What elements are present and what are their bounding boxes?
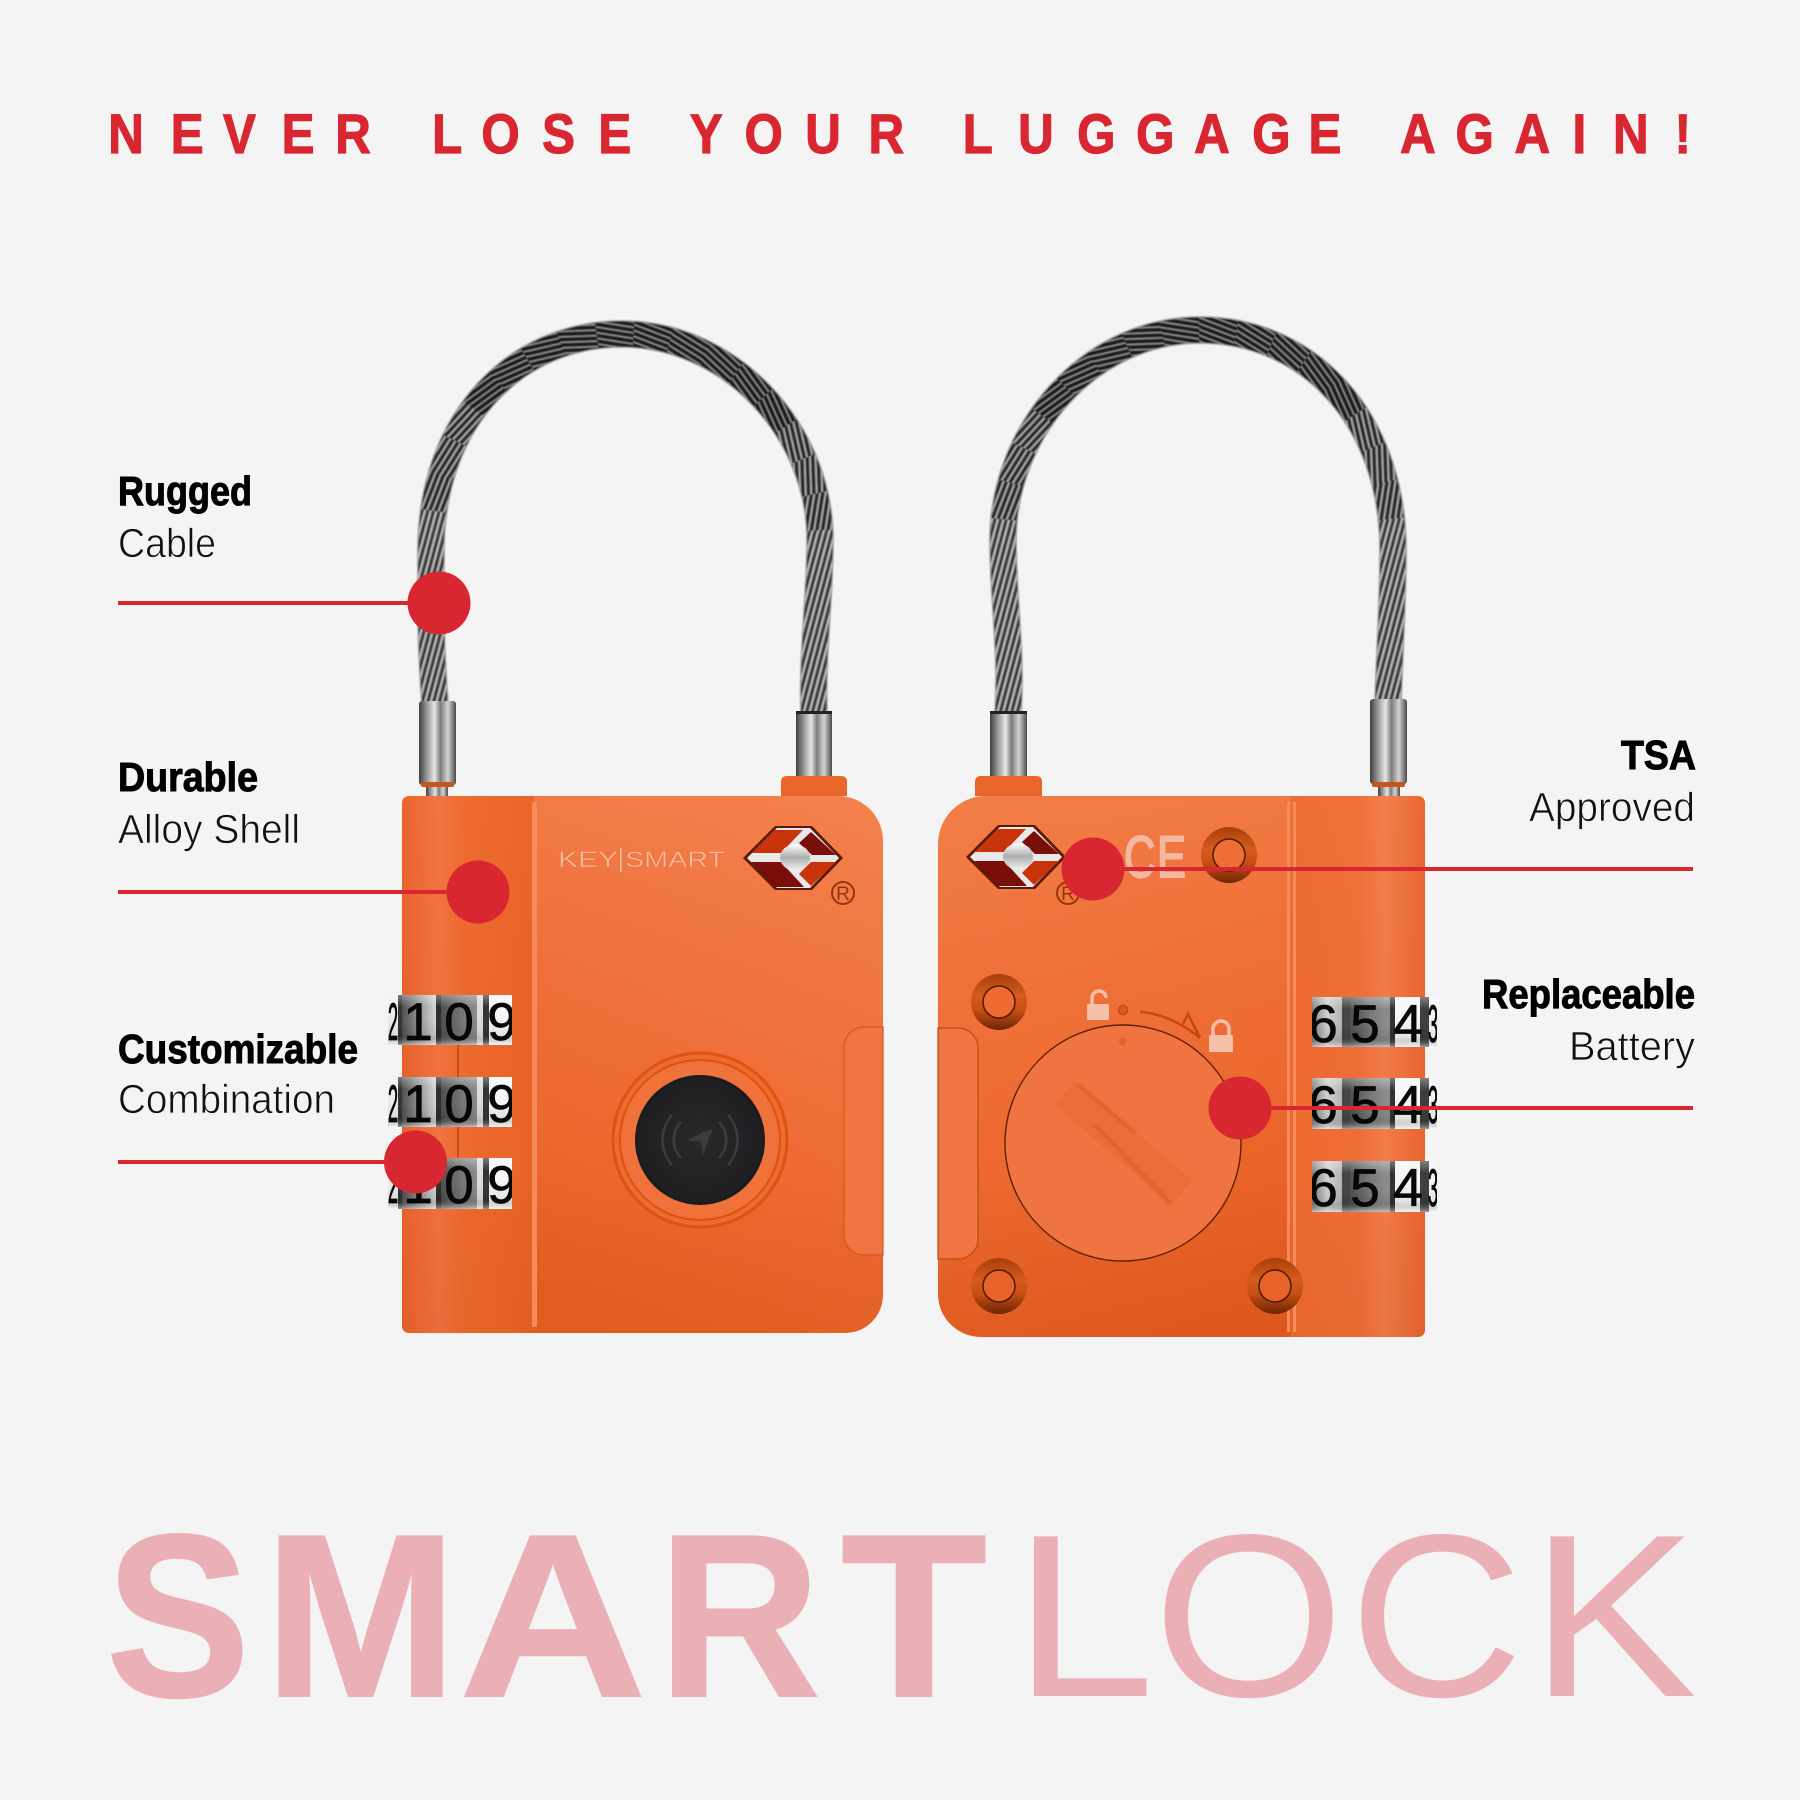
icon: rotate arrow <box>1140 1012 1200 1038</box>
registered mark <box>832 882 854 905</box>
screw hole: lower left <box>971 1258 1027 1314</box>
product name: R <box>658 1487 821 1746</box>
callout: Customizable Combination: Customizable <box>118 1026 358 1072</box>
brand wordmark: SMART <box>625 847 725 872</box>
title <box>108 103 1691 166</box>
combination dial 1: 3 <box>1428 995 1438 1054</box>
combination dial 1: 0 <box>444 993 474 1052</box>
combination dial 2 <box>1312 1078 1437 1129</box>
callout: Durable Alloy Shell: Alloy Shell <box>118 806 300 852</box>
cable collars <box>419 701 832 796</box>
product name: K <box>1530 1487 1697 1746</box>
combination dial 1 <box>388 995 512 1045</box>
combination dial 3: 1 <box>403 1156 433 1215</box>
callout: TSA Approved: TSA <box>1621 732 1696 778</box>
registered mark <box>1057 882 1079 905</box>
screw hole: lower right <box>1247 1258 1303 1314</box>
divider <box>1287 802 1296 1332</box>
battery cover <box>1005 1025 1241 1261</box>
callout: Replaceable Battery <box>1208 971 1695 1140</box>
combination dial 1: 6 <box>1308 995 1338 1054</box>
screw hole: top <box>1201 827 1257 883</box>
seam between dials <box>457 1045 459 1158</box>
product name: M <box>264 1487 457 1746</box>
right cable <box>1003 330 1393 714</box>
combination dial 2: 5 <box>1350 1076 1380 1135</box>
CE mark <box>1124 825 1186 889</box>
battery cover slot <box>1055 1081 1192 1206</box>
callout: Durable Alloy Shell <box>118 754 510 924</box>
callout: Replaceable Battery: Replaceable <box>1482 971 1695 1017</box>
combination dial 3: 9 <box>487 1156 517 1215</box>
combination dial 2: 9 <box>487 1075 517 1134</box>
combination dial 2: 6 <box>1308 1076 1338 1135</box>
icon: TSA diamond <box>743 826 843 890</box>
callout: Replaceable Battery: Battery <box>1569 1023 1695 1069</box>
left cable <box>431 334 820 714</box>
cover dot <box>1119 1038 1127 1046</box>
body shading <box>938 796 1425 1337</box>
lock body <box>938 796 1425 1337</box>
product name: A <box>459 1487 647 1746</box>
product name: L <box>1013 1486 1155 1745</box>
CE mark: C <box>1124 825 1155 889</box>
combination dial 3: 6 <box>1308 1159 1338 1218</box>
combination dial 1 <box>1312 997 1437 1047</box>
callout: TSA Approved <box>1062 732 1696 900</box>
brand wordmark <box>558 847 725 872</box>
combination dial 3: 3 <box>1428 1159 1438 1218</box>
top nub <box>781 776 847 796</box>
callout: Customizable Combination <box>118 1026 447 1194</box>
icon: locked padlock <box>1209 1021 1233 1052</box>
callout: Rugged Cable: Rugged <box>118 468 252 514</box>
combination dial 3: 5 <box>1350 1159 1380 1218</box>
combination dial 2: 1 <box>403 1075 433 1134</box>
registered mark: R <box>836 884 850 905</box>
combination dial 1: 4 <box>1393 995 1423 1054</box>
callout: TSA Approved: Approved <box>1529 784 1695 830</box>
button ring <box>613 1053 787 1227</box>
combination dial 3: 4 <box>1393 1159 1423 1218</box>
side panel <box>938 1028 978 1259</box>
CE mark: E <box>1157 825 1186 889</box>
right lock <box>938 330 1438 1337</box>
product name: S <box>106 1487 250 1746</box>
side panel <box>844 1027 883 1255</box>
icon: wireless arrow <box>663 1115 737 1165</box>
combination dial 2: 3 <box>1428 1076 1438 1135</box>
title: YOUR <box>690 103 904 166</box>
body shading <box>402 796 883 1333</box>
combination dial 3: 0 <box>444 1156 474 1215</box>
title: LUGGAGE <box>963 103 1341 166</box>
title: NEVER <box>108 103 371 166</box>
callout: Durable Alloy Shell: Durable <box>118 754 258 800</box>
registered mark: R <box>1061 884 1075 905</box>
indicator dot <box>1118 1006 1128 1014</box>
screw hole: upper left <box>971 974 1027 1030</box>
callout: Rugged Cable <box>118 468 470 634</box>
combination dial 1: 1 <box>403 993 433 1052</box>
product name: T <box>841 1486 987 1745</box>
product name: C <box>1349 1487 1523 1746</box>
icon: TSA diamond <box>966 825 1066 889</box>
callout: Customizable Combination: Combination <box>118 1076 335 1122</box>
top nub <box>975 776 1042 796</box>
combination dial 3 <box>1312 1161 1437 1212</box>
combination dial 3 <box>388 1158 512 1209</box>
product name <box>106 1486 1697 1746</box>
title: LOSE <box>432 103 631 166</box>
left lock <box>388 334 883 1333</box>
right strip of body <box>1291 796 1425 1337</box>
combination dial 2: 4 <box>1393 1076 1423 1135</box>
combination dial 2 <box>388 1077 512 1127</box>
combination dial 1: 2 <box>388 993 398 1052</box>
combination dial 3: 2 <box>388 1156 398 1215</box>
divider <box>532 802 537 1327</box>
icon: unlocked padlock <box>1087 991 1109 1020</box>
product name: O <box>1153 1486 1344 1745</box>
combination dial 1: 5 <box>1350 995 1380 1054</box>
combination dial 1: 9 <box>487 993 517 1052</box>
combination dial 2: 0 <box>444 1075 474 1134</box>
callout: Rugged Cable: Cable <box>118 520 216 566</box>
cable collars <box>990 699 1407 796</box>
brand wordmark: KEY <box>558 847 618 872</box>
button <box>635 1075 765 1205</box>
lock body <box>402 796 883 1333</box>
combination dial 2: 2 <box>388 1075 398 1134</box>
left strip of body <box>402 796 534 1333</box>
title: AGAIN! <box>1400 103 1691 166</box>
